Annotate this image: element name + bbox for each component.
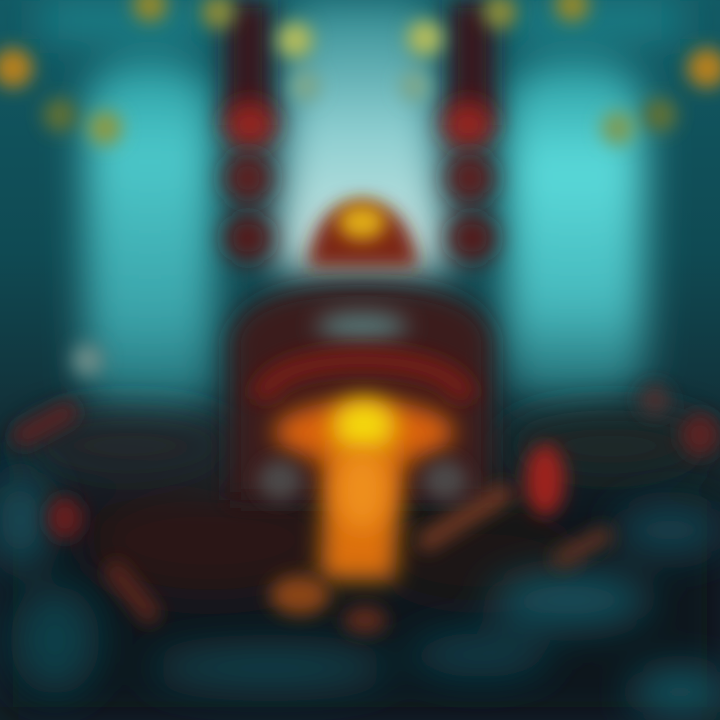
panel: bottom teal patches [0, 470, 720, 716]
icon: left red pillar [224, 0, 276, 262]
icon: red arch band [262, 360, 466, 400]
panel: right cyan light column [505, 0, 680, 410]
panel: left cyan light column [40, 0, 215, 430]
panel: central pale light shaft [275, 0, 450, 270]
icon: right red pillar [442, 0, 496, 262]
icon: dome [308, 200, 418, 268]
panel: bottom dark ground [0, 410, 720, 720]
panel: red debris and streaks [15, 344, 720, 634]
panel: machine body [230, 285, 492, 500]
icon: yellow and orange lights [0, 0, 720, 145]
icon: grey vent on machine [316, 312, 408, 340]
icon: glowing furnace [274, 399, 454, 580]
